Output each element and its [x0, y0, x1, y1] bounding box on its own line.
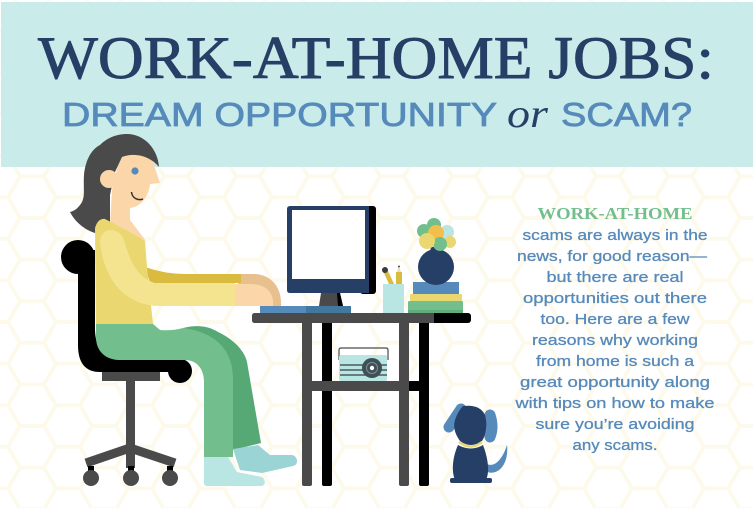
near leg	[96, 324, 233, 457]
header band	[1, 2, 753, 167]
intro text: great opportunity along	[520, 374, 710, 391]
keyboard	[260, 306, 351, 313]
far foot	[233, 445, 297, 473]
subtitle	[62, 91, 692, 136]
intro text: reasons why working	[532, 332, 698, 349]
intro text: but there are real	[546, 269, 684, 286]
subtitle: DREAM OPPORTUNITY	[62, 96, 497, 133]
title: WORK-AT-HOME JOBS:	[38, 25, 714, 91]
radio	[339, 348, 388, 381]
neck and face	[110, 154, 160, 241]
dog	[449, 406, 507, 483]
subtitle: SCAM?	[561, 96, 692, 133]
intro text: opportunities out there	[523, 290, 707, 307]
far hand	[238, 274, 281, 306]
intro text: news, for good reason—	[517, 248, 708, 265]
vase with flowers	[417, 218, 456, 285]
smile	[132, 192, 143, 200]
intro text: sure you’re avoiding	[536, 416, 694, 433]
intro text: with tips on how to make	[514, 395, 714, 412]
intro text	[514, 204, 714, 454]
intro text: any scams.	[572, 437, 658, 454]
intro text: WORK-AT-HOME	[538, 204, 692, 223]
office chair	[61, 240, 192, 486]
near hand	[232, 284, 273, 306]
intro text: too. Here are a few	[540, 311, 690, 328]
pencil cup	[382, 266, 404, 313]
near arm	[100, 230, 235, 306]
far arm	[145, 267, 241, 283]
eye	[131, 167, 139, 175]
woman at desk	[70, 134, 297, 486]
far leg	[183, 326, 261, 450]
intro text: scams are always in the	[522, 227, 708, 244]
computer monitor	[287, 206, 376, 306]
desk	[252, 313, 471, 486]
intro text: from home is such a	[536, 353, 695, 370]
stack of books	[408, 282, 463, 313]
hair	[70, 134, 159, 233]
near foot	[204, 457, 265, 486]
ear	[100, 170, 118, 188]
subtitle: or	[507, 91, 548, 136]
torso	[95, 219, 153, 324]
